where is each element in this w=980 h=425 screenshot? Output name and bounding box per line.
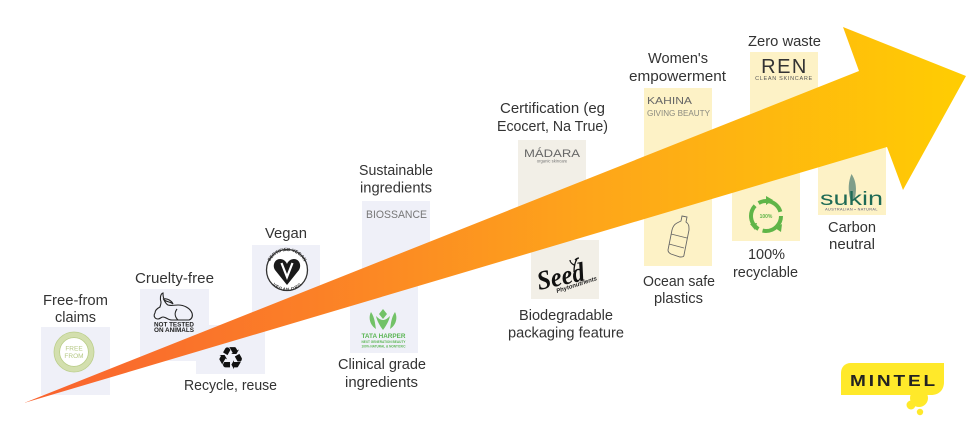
panel: vegan xyxy=(252,226,320,312)
logo: sukin: AUSTRALIAN • NATURAL xyxy=(825,208,878,212)
icon: free from seal xyxy=(54,332,94,372)
logo: kahina xyxy=(647,96,711,118)
panel: cruelty-free xyxy=(135,271,214,361)
logo: ren: REN xyxy=(761,56,808,78)
heading: 100% recyclable: 100% xyxy=(748,247,785,263)
heading: clinical grade ingredients xyxy=(338,357,426,391)
logo: tata harper xyxy=(362,309,406,348)
heading: carbon neutral: neutral xyxy=(829,237,875,253)
logo: madara xyxy=(524,147,581,164)
heading: biodegradable packaging feature xyxy=(508,308,624,342)
heading: sustainable ingredients: Sustainable xyxy=(359,163,433,179)
heading: certification xyxy=(497,101,608,135)
icon: free from seal: FREE xyxy=(65,346,83,352)
logo: biossance: BIOSSANCE xyxy=(366,209,427,221)
logo: mintel: MINTEL xyxy=(850,373,938,390)
heading: recycle, reuse: Recycle, reuse xyxy=(184,378,277,394)
logo: mintel xyxy=(841,363,944,415)
heading: ocean safe plastics: Ocean safe xyxy=(643,274,715,290)
icon: certified vegan seal: CERTIFIED VEGAN xyxy=(268,248,307,262)
logo: madara: MÁDARA xyxy=(524,147,581,160)
panel: 100% recyclable xyxy=(732,150,800,281)
panel: women's empowerment and ocean safe plastics xyxy=(629,51,726,307)
panel: biodegradable packaging feature xyxy=(508,240,624,342)
icon: certified vegan seal xyxy=(266,248,308,292)
logo: kahina: GIVING BEAUTY xyxy=(647,109,711,118)
heading: women's empowerment: empowerment xyxy=(629,69,726,85)
heading: sustainable ingredients: ingredients xyxy=(360,180,432,196)
icon: 100% recycled loop: 100% xyxy=(760,214,773,220)
heading: free-from claims: claims xyxy=(55,310,96,326)
heading: sustainable ingredients xyxy=(359,163,433,196)
logo: seed: Phytonutrients xyxy=(556,276,599,295)
icon: rabbit not tested on animals: ON ANIMALS xyxy=(154,327,194,334)
logo: tata harper: NEXT GENERATION BEAUTY xyxy=(362,340,406,344)
heading: ocean safe plastics: plastics xyxy=(654,291,703,307)
heading: biodegradable packaging feature: Biodegradable xyxy=(519,308,613,324)
panel: carbon neutral xyxy=(818,140,886,253)
icon: recycle symbol: ♻ xyxy=(217,341,244,377)
heading: cruelty-free: Cruelty-free xyxy=(135,271,214,287)
panel: sustainable ingredients xyxy=(359,163,433,281)
logo: tata harper: TATA HARPER xyxy=(362,334,406,340)
icon: free from seal: FROM xyxy=(64,353,84,360)
icon: rabbit not tested on animals: NOT TESTED xyxy=(154,322,195,328)
logo: ren: CLEAN SKINCARE xyxy=(755,76,813,82)
heading: women's empowerment: Women's xyxy=(648,51,708,67)
heading: free-from claims: Free-from xyxy=(43,293,108,309)
logo: seed: Seed xyxy=(534,256,588,296)
icon: certified vegan seal: VEGAN.ORG xyxy=(273,282,301,291)
heading: 100% recyclable: recyclable xyxy=(733,265,798,281)
heading: biodegradable packaging feature: packaging feature xyxy=(508,326,624,342)
heading: carbon neutral xyxy=(828,220,876,253)
heading: vegan: Vegan xyxy=(265,226,307,242)
heading: clinical grade ingredients: Clinical grade xyxy=(338,357,426,373)
heading: zero waste: Zero waste xyxy=(748,34,821,50)
panel: free-from claims xyxy=(41,293,110,395)
logo: kahina: KAHINA xyxy=(647,96,692,107)
logo: tata harper: 100% NATURAL & NONTOXIC xyxy=(362,344,406,348)
heading: 100% recyclable xyxy=(733,247,798,281)
logo: madara: organic skincare xyxy=(537,158,568,164)
heading: women's empowerment xyxy=(629,51,726,85)
heading: free-from claims xyxy=(43,293,108,326)
panel: recycle, reuse xyxy=(184,325,277,394)
panel: certification xyxy=(497,101,608,220)
panel: clinical grade ingredients xyxy=(338,285,426,391)
icon: rabbit not tested on animals xyxy=(154,293,195,334)
logo: sukin: sukin xyxy=(820,189,883,210)
logo: ren xyxy=(755,56,813,82)
logo: sukin xyxy=(820,174,883,212)
heading: certification: Ecocert, Na True) xyxy=(497,119,608,135)
panel: zero waste xyxy=(748,34,821,122)
heading: carbon neutral: Carbon xyxy=(828,220,876,236)
icon: plastic bottle xyxy=(668,216,689,257)
heading: certification: Certification (eg xyxy=(500,101,605,117)
heading: ocean safe plastics xyxy=(643,274,715,307)
heading: clinical grade ingredients: ingredients xyxy=(345,375,418,391)
